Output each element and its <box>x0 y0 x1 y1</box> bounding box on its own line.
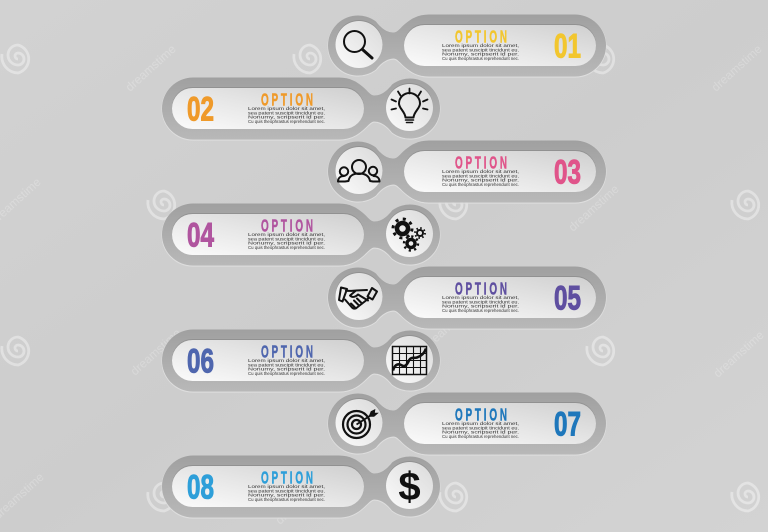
body text: sea patent suscipit tincidunt eu. <box>442 173 519 179</box>
heading: OPTION <box>455 154 507 173</box>
watermark: dreamstime <box>128 326 184 378</box>
body text: Nonumy, scripserit id per. <box>442 430 519 436</box>
row 05 <box>328 266 606 329</box>
body text: Nonumy, scripserit id per. <box>248 366 325 372</box>
heading: OPTION <box>455 28 507 47</box>
watermark: dreamstime <box>123 42 179 94</box>
number: 08 <box>187 468 214 506</box>
body text: Nonumy, scripserit id per. <box>248 240 325 246</box>
body text: Lorem ipsum dolor sit amet, <box>248 106 325 112</box>
row 01 <box>328 14 606 77</box>
body text: Cu quis theophrastus reprehendunt nec. <box>442 56 519 62</box>
row 04 <box>162 204 440 266</box>
icon: magnifier <box>344 31 372 58</box>
number: 04 <box>187 216 214 254</box>
heading: OPTION <box>261 343 313 362</box>
body text: Cu quis theophrastus reprehendunt nec. <box>248 497 325 503</box>
body text: Lorem ipsum dolor sit amet, <box>442 169 519 175</box>
icon: gears <box>393 219 425 250</box>
body text: Cu quis theophrastus reprehendunt nec. <box>248 245 325 251</box>
watermark: dreamstime <box>273 475 329 527</box>
body text: Cu quis theophrastus reprehendunt nec. <box>442 308 519 314</box>
body text: sea patent suscipit tincidunt eu. <box>248 236 325 242</box>
number: 06 <box>187 342 214 380</box>
body text: Cu quis theophrastus reprehendunt nec. <box>442 182 519 188</box>
body text: Cu quis theophrastus reprehendunt nec. <box>248 119 325 125</box>
heading: OPTION <box>455 406 507 425</box>
body text: Nonumy, scripserit id per. <box>442 304 519 310</box>
body text <box>248 106 325 125</box>
watermark: dreamstime <box>709 42 765 94</box>
row 07 <box>328 392 606 455</box>
number: 01 <box>554 28 581 66</box>
heading: OPTION <box>455 280 507 299</box>
body text: Lorem ipsum dolor sit amet, <box>248 358 325 364</box>
body text <box>442 421 519 440</box>
heading: OPTION <box>261 469 313 488</box>
body text: Lorem ipsum dolor sit amet, <box>442 421 519 427</box>
icon: target <box>343 410 378 438</box>
body text: Cu quis theophrastus reprehendunt nec. <box>442 434 519 440</box>
icon: handshake <box>339 288 377 309</box>
watermark: dreamstime <box>711 328 767 380</box>
icon: people <box>338 160 380 182</box>
heading: OPTION <box>261 91 313 110</box>
watermark: dreamstime <box>421 300 477 352</box>
body text: Lorem ipsum dolor sit amet, <box>248 484 325 490</box>
body text: Cu quis theophrastus reprehendunt nec. <box>248 371 325 377</box>
body text: sea patent suscipit tincidunt eu. <box>442 47 519 53</box>
icon: light bulb <box>392 88 428 122</box>
icon: line chart <box>392 346 426 374</box>
row 02 <box>162 78 440 140</box>
heading: OPTION <box>261 217 313 236</box>
body text: sea patent suscipit tincidunt eu. <box>248 362 325 368</box>
body text: sea patent suscipit tincidunt eu. <box>248 488 325 494</box>
body text <box>442 169 519 188</box>
body text: Lorem ipsum dolor sit amet, <box>442 43 519 49</box>
icon: dollar: $ <box>398 465 421 509</box>
body text: Lorem ipsum dolor sit amet, <box>442 295 519 301</box>
number: 03 <box>554 154 581 192</box>
body text <box>248 484 325 503</box>
body text: Nonumy, scripserit id per. <box>442 178 519 184</box>
number: 02 <box>187 90 214 128</box>
body text <box>442 295 519 314</box>
row 06 <box>162 330 440 392</box>
body text: Nonumy, scripserit id per. <box>248 492 325 498</box>
row 03 <box>328 140 606 203</box>
body text: Nonumy, scripserit id per. <box>442 52 519 58</box>
body text: sea patent suscipit tincidunt eu. <box>248 110 325 116</box>
body text <box>248 232 325 251</box>
body text: Lorem ipsum dolor sit amet, <box>248 232 325 238</box>
row 08 <box>162 456 440 518</box>
body text <box>248 358 325 377</box>
body text: Nonumy, scripserit id per. <box>248 114 325 120</box>
number: 05 <box>554 280 581 318</box>
body text: sea patent suscipit tincidunt eu. <box>442 299 519 305</box>
number: 07 <box>554 406 581 444</box>
body text <box>442 43 519 62</box>
watermark: dreamstime <box>566 182 622 234</box>
body text: sea patent suscipit tincidunt eu. <box>442 425 519 431</box>
